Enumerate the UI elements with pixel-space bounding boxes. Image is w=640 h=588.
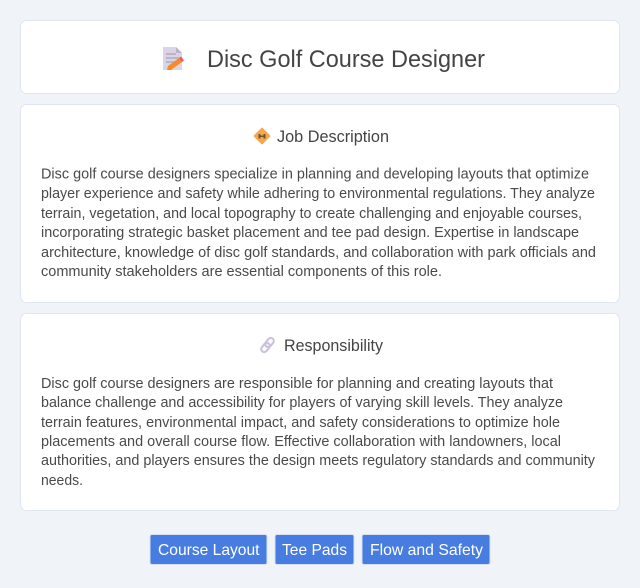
tag: flow and safety xyxy=(362,534,490,564)
text block: responsibility: authorities, and players ensures the design meets regulatory standards and community xyxy=(41,453,596,469)
text block: job description: Disc golf course designers specialize in planning and developing layouts that optimize xyxy=(41,166,589,182)
icon: diamond road sign xyxy=(255,129,269,143)
text block: job description: architecture, knowledge of disc golf standards, and collaboration with park officials and xyxy=(41,245,596,261)
text block: job description: player experience and safety while adhering to environmental regulations. They analyze xyxy=(41,186,595,202)
title: Disc Golf Course Designer xyxy=(207,46,485,73)
heading: job description: Job Description xyxy=(277,128,389,146)
text block: responsibility: terrain features, environmental impact, and safety considerations to optimize hole xyxy=(41,415,560,431)
tag: course layout: Course Layout xyxy=(158,542,260,559)
panel: job description xyxy=(20,104,620,302)
panel: title card xyxy=(20,20,620,94)
text block: responsibility: placements and overall course flow. Effective collaboration with landowners, local xyxy=(41,434,561,450)
panel: responsibility xyxy=(20,314,620,510)
text block: job description xyxy=(41,166,596,280)
tag: course layout xyxy=(150,534,267,564)
heading: responsibility: Responsibility xyxy=(284,337,384,355)
text block: job description: terrain, vegetation, and local topography to create challenging and enjoyable courses, xyxy=(41,206,582,222)
text block: responsibility: needs. xyxy=(41,473,83,489)
text block: job description: community stakeholders are essential components of this role. xyxy=(41,264,442,280)
text block: responsibility xyxy=(41,376,596,489)
icon: chain link xyxy=(260,337,275,353)
tag: tee pads xyxy=(275,534,354,564)
text block: responsibility: Disc golf course designers are responsible for planning and creating layouts that xyxy=(41,376,553,392)
tag: tee pads: Tee Pads xyxy=(282,542,347,559)
tag: flow and safety: Flow and Safety xyxy=(370,542,483,559)
text block: job description: incorporating strategic basket placement and tee pad design. Expertise in landscape xyxy=(41,225,579,241)
text block: responsibility: balance challenge and accessibility for players of varying skill levels. They analyze xyxy=(41,395,563,411)
icon: document with pencil xyxy=(163,47,184,70)
